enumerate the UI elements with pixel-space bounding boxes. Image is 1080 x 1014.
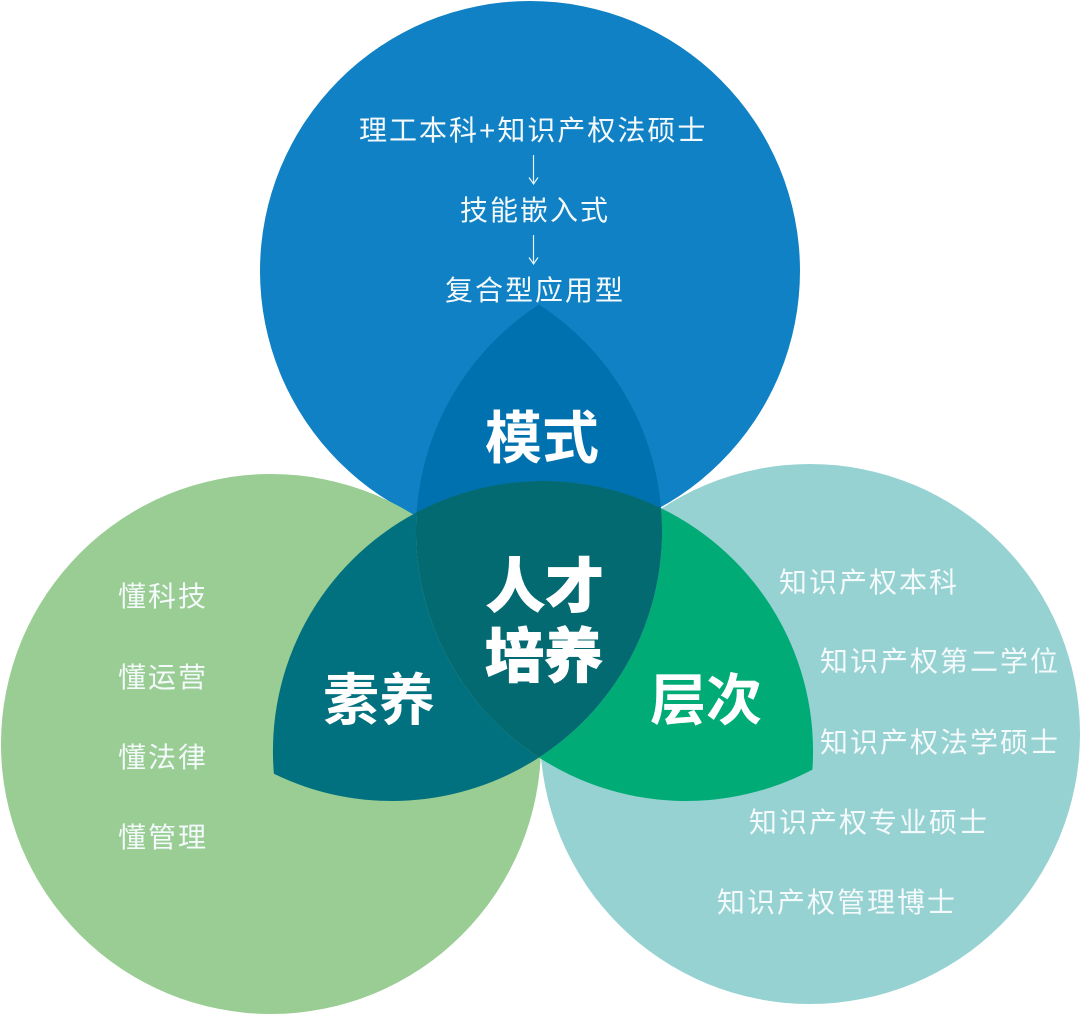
overlap: 层次 (539, 508, 813, 801)
text: undergraduate plus master: 理工本科+知识产权法硕士 (359, 115, 707, 146)
text block: literacy list (118, 581, 208, 853)
heading: 人才: 人才 (486, 554, 604, 620)
text: bachelor: 知识产权本科 (779, 567, 959, 598)
text: 懂法律: 懂法律 (118, 742, 208, 773)
overlap: 模式 (417, 304, 661, 512)
text: management doctorate: 知识产权管理博士 (717, 887, 957, 918)
text: applied compound: 复合型应用型 (445, 275, 625, 306)
arrow: down 1 (529, 155, 538, 184)
overlap: 素养 (273, 512, 539, 801)
text: professional master: 知识产权专业硕士 (749, 807, 989, 838)
heading: 培养: 培养 (485, 624, 603, 690)
circle: left green (1, 474, 541, 1014)
circle: right teal (540, 464, 1080, 1004)
text: law master: 知识产权法学硕士 (820, 727, 1060, 758)
text: 懂科技: 懂科技 (118, 581, 208, 612)
text block: model progression (359, 115, 707, 306)
overlap: centre 人才培养 (416, 481, 662, 758)
arrow: down 2 (529, 235, 538, 264)
heading: 模式: 模式 (485, 407, 599, 471)
text: second degree: 知识产权第二学位 (820, 646, 1060, 677)
text: 懂运营: 懂运营 (118, 662, 208, 693)
text block: level list (717, 567, 1060, 918)
heading: 素养: 素养 (323, 669, 435, 732)
heading: 层次: 层次 (650, 669, 762, 732)
circle: top blue (260, 1, 800, 541)
text: embedded skills: 技能嵌入式 (460, 195, 610, 226)
text: 懂管理: 懂管理 (118, 822, 208, 853)
